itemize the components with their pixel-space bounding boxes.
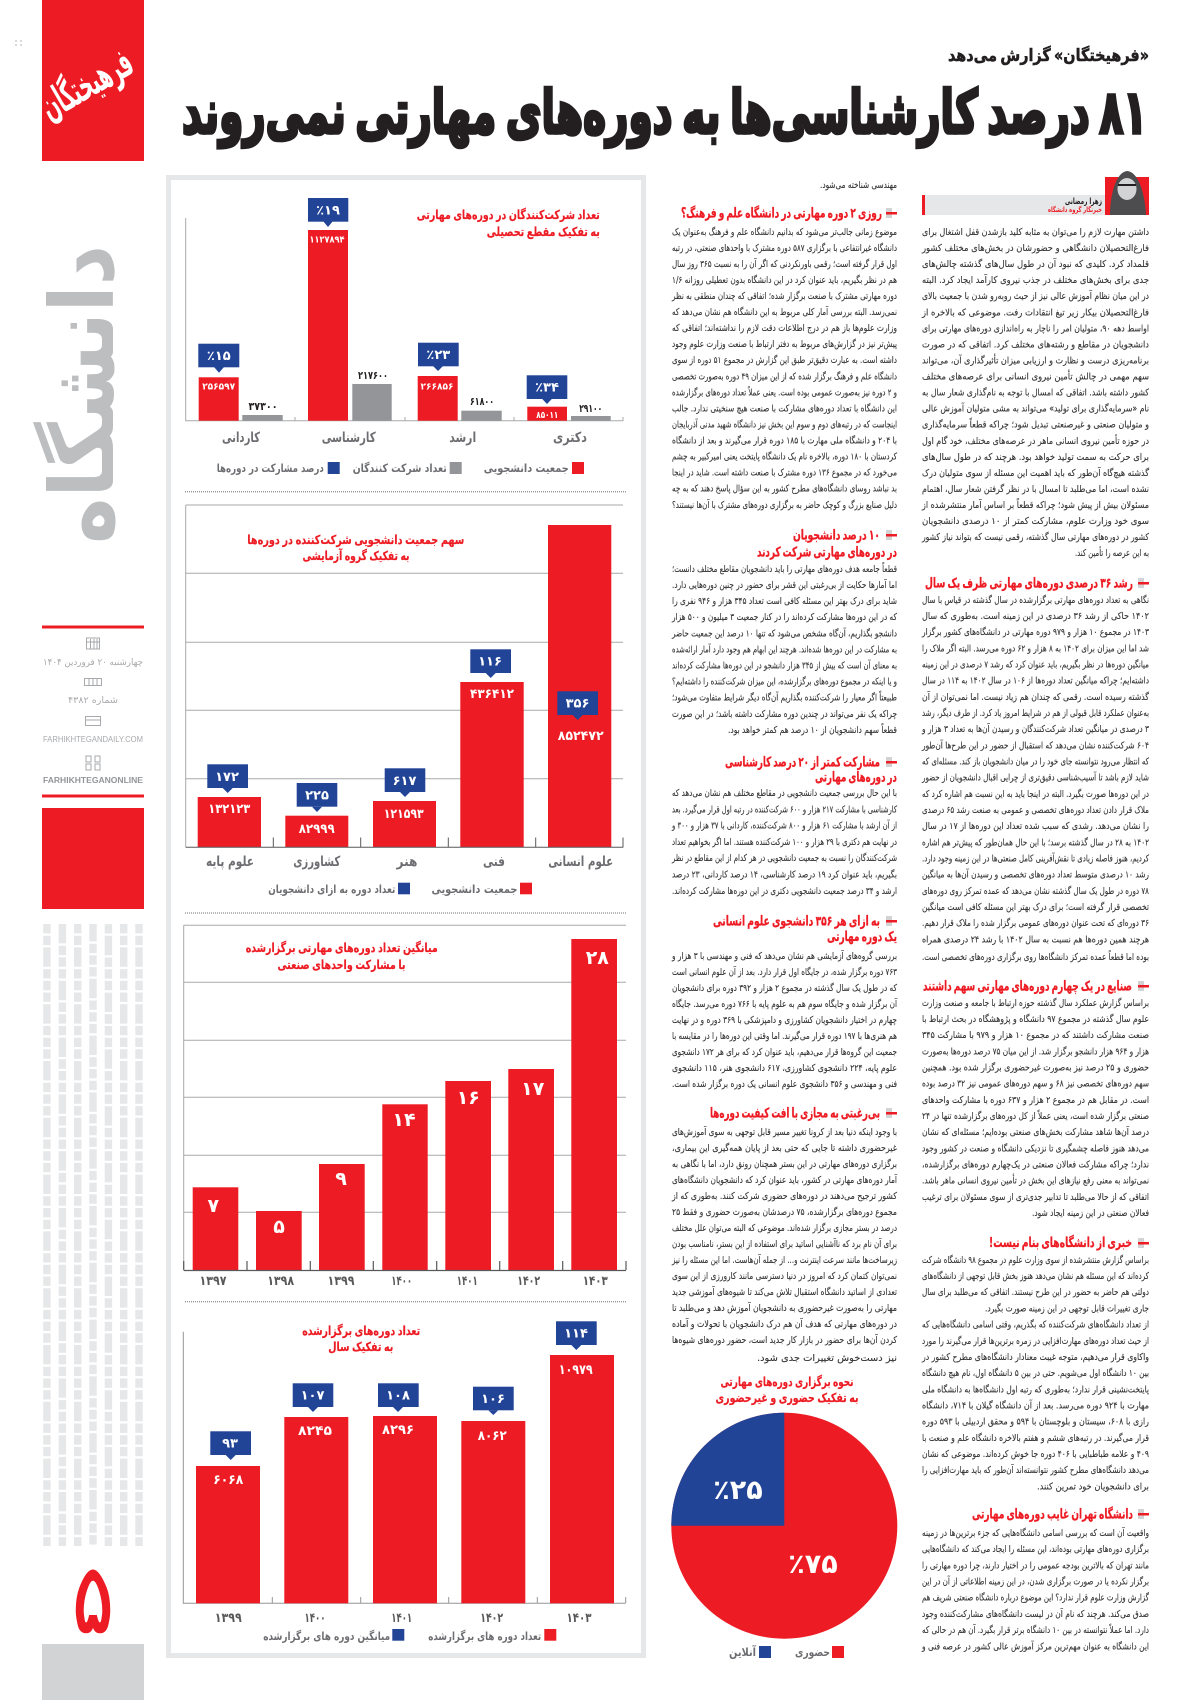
bars — [196, 1355, 614, 1603]
text block: lead: نام «سرمایه‌گذاری برای تولید» می‌تواند به مشی متولیان آموزش عالی — [922, 402, 1149, 414]
legend: تعداد دوره های برگزارشده — [428, 1629, 541, 1644]
panel: charts frame — [168, 178, 644, 1656]
text block: growth: هرچند همین دوره‌ها هم نسبت به سال ۱۴۰۲ با رشد ۲۴ درصدی همراه — [922, 934, 1149, 946]
callout: ۱۷۲: ۱۷۲ — [215, 770, 239, 785]
callout: ۱۵ — [198, 344, 239, 373]
gridlines — [186, 505, 623, 847]
year labels: ۱۳۹۸ — [267, 1274, 294, 1289]
text block: growth: ۱۴۰۳ در مجموع ۱۰ هزار و ۹۷۹ دوره مهارتی در دانشگاه‌های کشور برگزار — [921, 626, 1149, 638]
bars: دکتری — [527, 407, 611, 421]
icon: issue number — [84, 678, 102, 686]
text block: section 5: در دوره‌های مهارتی که هدف آن هم درک دانشجویان با تحولات و آماده — [672, 1317, 897, 1330]
baseline — [186, 838, 623, 848]
text block: section 4: ۷۶۳ دوره برگزار شده، در جایگاه اول قرار دارد. بعد از آن علوم انسانی است — [672, 965, 897, 978]
legend: تعداد شرکت کنندگان — [353, 461, 447, 475]
text block: tehran university: دارد. اما عملاً نتوانسته در بین ۱۰ دانشگاه برتر قرار بگیرد. آن هم در حالی که — [922, 1623, 1149, 1636]
category labels: فنی — [483, 854, 505, 870]
legend — [729, 1645, 844, 1660]
text block: section 3: در نهایت هم دکتری با ۲۹ هزار و ۱۰۰ شرکت‌کننده هستند. اما اگر بخواهیم تعداد — [672, 836, 897, 848]
year labels: ۱۴۰۰ — [304, 1611, 326, 1626]
year labels: ۱۳۹۹ — [215, 1611, 242, 1626]
bar values: ۱۰۹۷۹ — [559, 1362, 593, 1378]
text block: lead: سوی خود وزارت علوم، مشارکت کمتر از ۱۰ درصدی دانشجویان — [922, 516, 1149, 527]
bar values: ۸۲۴۵ — [298, 1423, 332, 1439]
text block: section 4: فنی و مهندسی و ۳۵۶ دانشجوی علوم انسانی یک دوره برگزار شده است. — [672, 1078, 897, 1090]
text block: lead: در حوزه تأمین نیروی انسانی ماهر در عرصه‌های مختلف، خود گام اول — [922, 434, 1149, 447]
year labels — [215, 1611, 592, 1626]
legend: میانگین دوره های برگزارشده — [263, 1629, 390, 1644]
bar values: ۸۲۹۹۹ — [299, 822, 335, 837]
text block: lead: نشده است، اما می‌طلبد تا امسال با در نظر گرفتن شعار سال، اهتمام — [922, 483, 1149, 495]
website address: FARHIKHTEGANDAILY.COM — [43, 735, 143, 744]
text block: section 1: دانشگاه علم و فرهنگ برگزار شده که از این میزان ۴۹ دوره به‌صورت تخصصی — [672, 370, 897, 382]
text block: section 5: مهارتی را به‌صورت غیرحضوری به دانشجویان آموزش دهد و می‌طلبد تا — [672, 1301, 897, 1314]
callout: ۹۳: ۹۳ — [222, 1436, 238, 1452]
bar values — [208, 687, 604, 837]
chart title: سهم جمعیت دانشجویی شرکت‌کننده در دوره‌ها — [247, 532, 464, 547]
text: continuation line: مهندسی شناخته می‌شود. — [820, 180, 897, 191]
callout: ۶۱۷: ۶۱۷ — [393, 774, 416, 789]
text block: section 5: آمار دوره‌های مهارتی در کشور، باید عنوان کرد که دانشجویان دانشگاه‌های — [672, 1173, 897, 1186]
text block: section 1: نمی‌رسد. البته بررسی آمار کلی مربوط به این دانشگاه هم نشان می‌دهد که — [672, 305, 897, 318]
category labels: علوم پایه — [206, 854, 254, 870]
text block: growth — [921, 594, 1149, 963]
text block: section 1: دانشگاه غیرانتفاعی با برگزاری ۵۸۷ دوره مشترک با واحدهای صنعتی، در رتبه — [672, 242, 897, 254]
text block: section 1: با ۲۰۴ و دانشگاه ملی مهارت با ۱۸۵ دوره قرار می‌گیرند و بعد از دانشگاه — [672, 434, 897, 446]
heading: 36 percent growth: رشد ۳۶ درصدی دوره‌های مهارتی ظرف یک سال — [925, 576, 1133, 592]
text block: section 5: مجموع دوره‌های برگزارشده، ۷۵ درصدشان به‌صورت حضوری و فقط ۲۵ — [672, 1206, 897, 1218]
text block: section 5: با وجود اینکه دنیا بعد از کرونا تغییر مسیر قابل توجهی به سوی آموزش‌های — [672, 1125, 897, 1138]
text block: top universities: ۴۰۹ و علامه طباطبایی با ۴۰۶ دوره جا خوش کرده‌اند. موضوعی که نشان — [922, 1449, 1149, 1460]
column: middle article — [671, 180, 897, 1364]
text block: section 2 — [671, 562, 897, 736]
text block: growth: داشته‌ایم؛ چراکه میانگین تعداد دوره‌ها از ۱۰۶ در سال ۱۴۰۲ به ۱۱۴ در سال — [922, 674, 1149, 686]
text block: top universities: برای دانشجویان خود تمرین کنند. — [1037, 1482, 1149, 1492]
heading: per 356 humanities students: به ازای هر ۳۵۶ دانشجوی علوم انسانی — [713, 914, 880, 930]
issue date: چهارشنبه ۲۰ فروردین ۱۴۰۴ — [43, 658, 143, 668]
text block: section 1: اول قرار گرفته است؛ رقمی باورنکردنی که اگر آن را به نسبت ۳۶۵ روز سال — [672, 257, 897, 270]
sidebar: bottom grey block — [42, 1644, 144, 1700]
icon: social networks — [86, 756, 100, 770]
callout: ۱۰۷: ۱۰۷ — [301, 1388, 324, 1404]
column: right article — [921, 171, 1149, 1652]
category labels — [206, 854, 613, 870]
text block: lead: برنامه‌ریزی درست و نظارت و ارزیابی میزان تأثیرگذاری آن، می‌تواند — [922, 354, 1149, 366]
bar values: ۳۷۳۰۰ — [248, 400, 278, 413]
text block: lead: سهم مهمی در چالش تأمین نیروی انسانی برای عرصه‌های مختلف — [922, 370, 1149, 382]
bar values: ۸۵۲۴۷۲ — [558, 729, 604, 744]
text block: section 1: این دانشگاه با تعداد دوره‌های مشارکت با صنعت هیچ سنخیتی ندارد. جالب — [672, 402, 897, 414]
text block: lead: فارغ‌التحصیلان بیکار زیر تیغ انتقادات رفت. موضوعی که بالاخره از — [921, 308, 1149, 318]
callout: ۲۲۵ — [297, 783, 337, 812]
text block: section 4: که در طول یک سال گذشته در مجموع ۲ هزار و ۳۹۲ دوره برای دانشجویان — [672, 982, 897, 994]
callout: ۶۱۷ — [385, 768, 425, 797]
text block: section 2: به معنای آن است که بیش از ۳۴۵ هزار دانشجو در این دوره‌ها مشارکت کرده‌اند — [672, 658, 897, 672]
bar values: ۱۱۲۷۸۹۴ — [310, 234, 345, 246]
text block: section 5: درصد در بستر مجازی برگزار شده‌اند. موضوعی که البته می‌توان علل مختلف — [672, 1222, 897, 1234]
callout: ۱۰۷ — [293, 1383, 333, 1412]
pie slices — [671, 1413, 897, 1639]
callout: ۱۱۴ — [556, 1321, 597, 1350]
bars: کارشناسی — [308, 230, 392, 421]
bar values: ۸۰۶۲ — [478, 1428, 507, 1444]
bar values: ۱۲۱۵۹۳ — [384, 807, 424, 822]
sidebar: issue information — [42, 626, 144, 798]
year labels: ۱۴۰۲ — [517, 1274, 540, 1289]
author box — [922, 171, 1149, 215]
text block: section 1: بد نباشد روسای دانشگاه‌های مطرح کشور به این سؤال پاسخ دهند که به چه — [672, 482, 897, 494]
callout: ۳۴: ٪۳۴ — [535, 380, 559, 396]
heading: per 356 humanities students: یک دوره مهارتی — [827, 929, 897, 945]
category labels: کارشناسی — [322, 430, 376, 446]
text block: industries — [922, 997, 1149, 1219]
callout: ۱۰۸ — [378, 1383, 419, 1412]
callout: ۱۷۲ — [207, 764, 248, 793]
text block: section 5: نیز دست‌خوش تغییرات جدی شود. — [757, 1353, 897, 1364]
text block: section 4: هم هنری‌ها با ۱۹۷ دوره قرار می‌گیرند. اما وقتی این دوره‌ها را در مقایسه با — [672, 1030, 897, 1042]
year labels: ۱۴۰۳ — [566, 1611, 592, 1626]
text block: industries: علوم سال گذشته در مجموع ۹۷ دانشگاه و پژوهشگاه در بحث ارتباط با — [922, 1013, 1149, 1025]
text block: section 2: که در این دوره‌ها مشارکت کرده‌اند را در کنار جمعیت ۳ میلیون و ۵۰۰ هزار — [671, 612, 897, 623]
text block: section 1: دلیل صنایع بزرگ و کوچک حاضر به برگزاری دوره‌های مشترک با آن‌ها نیستند؟ — [672, 498, 897, 511]
text block: lead: گذشته هیچ‌گاه آن‌طور که باید اهمیت این مسئله از سوی متولیان درک — [922, 466, 1149, 479]
text block: top universities: بین ۱۰ دانشگاه اول می‌شویم. حتی در بین ۵ دانشگاه اول، نام هیچ دانشگاه — [922, 1367, 1149, 1379]
callout: ۱۹: ٪۱۹ — [316, 204, 340, 218]
year labels — [200, 1274, 608, 1289]
text block: top universities — [921, 1254, 1149, 1492]
sidebar: barcode pattern — [47, 924, 139, 1546]
text block: lead: مسئولان بیش از پیش شود؛ چراکه قطعاً بر اساس آمار منتشرشده از — [921, 498, 1149, 511]
text block: industries: فعالان صنعتی در این زمینه ایجاد شود. — [1032, 1208, 1149, 1219]
legend: جمعیت دانشجویی — [484, 461, 569, 476]
legend: آنلاین — [729, 1645, 757, 1659]
text block: section 1: کردستان با ۱۸۰ دوره، بالاخره نام یک دانشگاه پایتخت یعنی امیرکبیر به چشم — [672, 450, 897, 462]
chart title: به تفکیک سال — [328, 1339, 393, 1354]
text block: growth: شد اما این میزان برای ۱۴۰۲ به ۸ هزار و ۶۲ دوره می‌رسد. البته اگر ملاک را — [922, 642, 1149, 654]
legend: درصد مشارکت در دوره‌ها — [217, 461, 324, 476]
text block: growth: رشد ۱۰ درصدی متوسط تعداد دوره‌های تخصصی و رسیدن آن‌ها به میانگین — [922, 868, 1149, 880]
bar values: ۴۳۶۴۱۲ — [470, 687, 514, 702]
legend — [263, 1629, 556, 1644]
chart title — [302, 1323, 420, 1354]
callout: ۱۹ — [308, 198, 348, 227]
text block: industries: صنعت مشارکت داشتند که در مجموع ۱۰ هزار و ۹۷۹ با مشارکت ۳۴۵ — [922, 1030, 1149, 1041]
text block: lead: به این عرصه را تأمین کند. — [1075, 546, 1149, 559]
bar values: ۲۹۱۰۰ — [579, 402, 602, 415]
text block: section 4 — [671, 949, 897, 1090]
bar values: ۱۷ — [521, 1078, 545, 1100]
text block: growth: ۱۴۰۲ به ۲۸ در سال گذشته برسد؛ با این حال همان‌طور که پیش‌تر هم اشاره — [922, 836, 1149, 848]
text block: section 5: برگزاری دوره‌های مهارتی در این بستر همچنان رونق دارد، اما با نگاهی به — [672, 1158, 897, 1170]
text block: section 1: هم در نظر بگیریم، باید عنوان کرد در این دانشگاه بدون تعطیلی روزانه ۱/۶ — [672, 274, 897, 286]
text block: growth: ۱۴۰۲ حاکی از رشد ۳۶ درصدی در این زمینه است. به‌طوری که سال — [922, 611, 1149, 622]
bars — [193, 939, 617, 1270]
year labels: ۱۴۰۰ — [391, 1274, 412, 1289]
text block: lead: دانشجویان در مقاطع و رشته‌های مختلف کرد. اتفاقی که در صورت — [922, 340, 1149, 350]
text block: section 2: قطعاً سهم دانشجویان از ۱۰ درصد هم کمتر خواهد بود. — [728, 723, 897, 736]
slice label: online: ٪۲۵ — [713, 1475, 763, 1506]
chart title: با مشارکت واحدهای صنعتی — [278, 957, 406, 972]
callout: ۱۰۶ — [473, 1387, 514, 1415]
bar values: ۶۰۶۸ — [213, 1472, 244, 1488]
text block: section 2: طبیعتاً اگر معیار را شرکت‌کننده بگذاریم آن‌گاه دیگر شرایط متفاوت می‌شود؛ — [672, 690, 897, 704]
chart title: به تفکیک حضوری و غیرحضوری — [716, 1390, 858, 1405]
text block: section 1: می‌خورد که در مجموع ۱۳۶ دوره مشترک با صنعت داشته است. شاید در اینجا — [672, 468, 897, 478]
text block: section 1: و ۲ دوره نیز به‌صورت عمومی بوده است. یعنی عملاً تعداد دوره‌های برگزارشده — [672, 386, 897, 398]
chart: average courses with industry — [184, 925, 626, 1289]
text block: section 1: اینجاست که در رتبه‌های دوم و سوم این بخش نیز دانشگاه شهید مدنی آذربایجان — [672, 418, 897, 430]
chart: student share by study group — [186, 505, 623, 897]
text block: section 2: شاید برای درک بهتر این مسئله کافی است تعداد ۳۴۵ هزار و ۹۴۶ نفری را — [672, 596, 897, 607]
text block: top universities: جاری تغییرات قابل توجهی در این زمینه صورت بگیرد. — [985, 1302, 1149, 1314]
callout: ۱۵: ٪۱۵ — [207, 349, 231, 364]
category labels: علوم انسانی — [548, 854, 613, 870]
legend: جمعیت دانشجویی — [432, 882, 518, 897]
text block: lead: داشتن مهارت لازم را می‌توان به مثابه کلید بازشدن قفل اشتغال برای — [922, 227, 1149, 238]
bar values: ۸۵۰۱۱ — [536, 410, 558, 421]
year labels: ۱۳۹۹ — [328, 1274, 355, 1289]
category labels: ارشد — [449, 430, 476, 446]
bar values — [213, 1362, 593, 1488]
callout: ۱۰۸: ۱۰۸ — [386, 1388, 410, 1404]
bar values: ۷ — [207, 1195, 219, 1217]
text block: section 2: قطعاً جامعه هدف دوره‌های مهارتی را باید دانشجویان مقاطع مختلف دانست؛ — [672, 562, 897, 575]
chart title — [417, 207, 600, 239]
callout: ۱۱۶ — [470, 649, 511, 678]
text block: section 1: دوره مهارتی مشترک با صنعت برگزار شده؛ اتفاقی که چندان منطقی به نظر — [671, 290, 897, 302]
chart title: تعداد شرکت‌کنندگان در دوره‌های مهارتی — [417, 207, 600, 222]
text block: section 5: زیرساخت‌ها مانند سرعت اینترنت و... از جمله آن‌هاست. اما این مسئله را نیز — [671, 1253, 897, 1266]
text block: section 1: پیش‌تر نیز در گزارش‌های مربوط به دفتر ارتباط با صنعت وزارت علوم وجود — [672, 338, 897, 350]
text block: section 3: بگیریم، باید عنوان کرد ۱۹ درصد کارشناسی، ۱۴ درصد کاردانی، ۲۳ درصد — [672, 868, 897, 880]
text block: industries: حضوری و ۲۵ درصد نیز به‌صورت غیرحضوری برگزار شده بود. همچنین — [922, 1062, 1149, 1074]
axes — [186, 218, 623, 421]
bars — [198, 525, 611, 847]
text block: section 3: با این حال بررسی جمعیت دانشجویی در مقاطع مختلف هم نشان می‌دهد که — [672, 788, 897, 799]
text block: section 4: علوم پایه، ۲۲۴ دانشجوی کشاورزی، ۶۱۷ دانشجوی هنر، ۱۱۵ دانشجوی — [672, 1063, 897, 1074]
category labels: دکتری — [553, 430, 587, 446]
text block: section 2: به مشارکت در این دوره‌ها شده‌اند. هرچند این ابهام هم وجود دارد آمار ارائه‌شده — [672, 642, 897, 656]
newspaper logo — [31, 0, 144, 161]
text block: section 2: چراکه یک نفر می‌تواند در چندین دوره مشارکت داشته باشد؛ در این صورت — [672, 709, 897, 720]
year labels: ۱۳۹۷ — [200, 1274, 227, 1289]
text block: section 5: برای آن نام برد که ناآشنایی اساتید برای استفاده از این بستر، نامناسب بودن — [672, 1237, 897, 1250]
bar values: ۱۶ — [457, 1087, 480, 1109]
axes — [183, 1332, 626, 1603]
category labels: کشاورزی — [293, 854, 341, 870]
author portrait — [1105, 171, 1149, 215]
heading: ten percent of students — [757, 528, 897, 560]
bar values: ۲۱۷۶۰۰ — [358, 369, 388, 382]
bar values — [202, 234, 602, 421]
heading: less than twenty percent: در دوره‌های مهارتی — [815, 770, 897, 786]
bar values: ۶۱۸۰۰ — [470, 395, 494, 408]
text block: lead: جدی برای بخش‌های مختلف در جذب نیروی کارآمد ایجاد کرد. البته — [922, 273, 1149, 286]
text block: lead — [921, 227, 1149, 559]
legend — [217, 461, 584, 476]
year labels: ۱۴۰۱ — [391, 1611, 412, 1626]
text block: tehran university — [921, 1526, 1149, 1652]
text block: section 4: بررسی گروه‌های آزمایشی هم نشان می‌دهد که فنی و مهندسی با ۳ هزار و — [671, 949, 897, 962]
text block: growth: را نشان می‌دهد. رشدی که سبب شده تعداد این دوره‌ها از ۱۷ در سال — [922, 821, 1149, 832]
subtitle kicker: «فرهیختگان» گزارش می‌دهد — [948, 45, 1149, 66]
text block: section 3: ارشد و ۳۴ درصد جمعیت دانشجویی دکتری در این دوره‌ها مشارکت کرده‌اند. — [672, 886, 897, 897]
text block: section 5: کشور ترجیح می‌دهند در دوره‌های حضوری شرکت کنند. به‌طوری که از — [671, 1191, 897, 1202]
chart: courses held by year — [183, 1321, 626, 1644]
category labels: هنر — [396, 854, 418, 870]
chart title — [247, 532, 464, 563]
gridlines — [184, 925, 626, 1270]
text block: lead: فارغ‌التحصیلان دانشگاهی و حضورشان در بخش‌های مختلف کشور — [921, 242, 1149, 254]
bar values: ۸۲۹۶ — [382, 1422, 414, 1438]
icon: website — [86, 716, 100, 726]
callout: ۳۵۶: ۳۵۶ — [566, 696, 589, 712]
text block: section 2: و یا اینکه در مجموع دوره‌های برگزارشده، این میزان شرکت‌کننده را داشته‌ایم؟ — [672, 676, 897, 688]
heading: science and culture university: روزی ۲ دوره مهارتی در دانشگاه علم و فرهنگ؟ — [681, 204, 882, 222]
chart title: میانگین تعداد دوره‌های مهارتی برگزارشده — [246, 940, 438, 955]
heading: less than twenty percent — [725, 754, 897, 786]
callout: ۲۲۵: ۲۲۵ — [305, 788, 329, 804]
bar values: ۱۴ — [392, 1109, 416, 1131]
text block: section 3: از آن ارشد با مشارکت ۶۱ هزار و ۸۰۰ شرکت‌کننده، کاردانی با ۳۷ هزار و ۳۰۰ و — [671, 818, 897, 832]
chart title — [716, 1374, 858, 1405]
text block: section 3: شرکت‌کنندگان را نسبت به جمعیت دانشجویی در هر کدام از این مقاطع در نظر — [671, 852, 897, 864]
bar values: ۲۵۶۵۹۷ — [202, 382, 235, 392]
legend: تعداد دوره به ازای دانشجویان — [268, 882, 395, 897]
text block: section 1: موضوع زمانی جالب‌تر می‌شود که بدانیم دانشگاه علم و فرهنگ به‌عنوان یک — [672, 226, 897, 238]
slice label: in person: ٪۷۵ — [788, 1549, 838, 1580]
chart: participants by degree — [186, 198, 623, 476]
text block: section 3 — [671, 788, 897, 897]
legend: حضوری — [795, 1645, 830, 1660]
heading: less than twenty percent: مشارکت کمتر از ۲۰ درصد کارشناسی — [725, 754, 880, 770]
bar values: ۱۳۲۱۲۳ — [208, 802, 250, 817]
text block: lead: و متولیان صنعتی و غیرصنعتی تبدیل شود؛ چراکه قطعاً سرمایه‌گذاری — [922, 417, 1149, 430]
page number: ۵ — [72, 1543, 114, 1655]
heading: ten percent of students: در دوره‌های مهارتی شرکت کردند — [757, 544, 897, 560]
author role: خبرنگار گروه دانشگاه — [1048, 205, 1102, 214]
text block: lead: اواسط دهه ۹۰، متولیان امر را ناچار به راه‌اندازی دوره‌های مهارتی برای — [922, 324, 1149, 334]
text block: section 4: جمعیت این گروه‌ها قرار می‌دهیم، باید عنوان کرد که برای هر ۱۷۲ دانشجوی — [672, 1046, 897, 1058]
text block: section 4: آن برگزار شده و جایگاه سوم هم به علوم پایه با ۷۶۶ دوره می‌رسد. جایگاه — [672, 997, 897, 1010]
text block: section 2: دانشجو بگذاریم، آن‌گاه مشخص می‌شود که تنها ۱۰ درصد این جمعیت حاضر — [671, 626, 897, 640]
icon: calendar — [86, 638, 100, 649]
year labels: ۱۴۰۱ — [457, 1274, 478, 1289]
author name: زهرا رمضانی — [1065, 197, 1102, 207]
text block: lead: کشور داشته باشد. اتفاقی که امسال با توجه به نام‌گذاری شعار سال به — [922, 386, 1149, 398]
chart title — [246, 940, 438, 972]
callout: ۳۵۶ — [557, 691, 598, 720]
social handle: FARHIKHTEGANONLINE — [43, 776, 144, 785]
text block: industries: سهم دوره‌های تخصصی نیز ۶۸ و سهم دوره‌های عمومی نیز ۳۲ درصد بوده — [922, 1078, 1149, 1090]
bar values: ۲۸ — [586, 947, 609, 969]
bar values: ۹ — [335, 1168, 347, 1190]
bars: کاردانی — [199, 377, 283, 421]
bars: ارشد — [418, 376, 502, 421]
text block: section 5: نمی‌توان کتمان کرد که امروز در دنیا دسترسی مانند کارورزی از این سوی — [672, 1271, 897, 1282]
sidebar: section name rotated: دانشگاه — [31, 245, 134, 544]
text block: section 4: چهارم در اختیار دانشجویان کشاورزی و دامپزشکی با ۳۶۹ دوره و در نهایت — [672, 1015, 897, 1026]
text block: section 5: کردن آن‌ها برای حضور در بازار کار جدید است، حضور دوره‌های شیوه‌ها — [672, 1333, 897, 1346]
text block: top universities: رازی با ۶۰۸، سیستان و بلوچستان با ۵۹۴ و محقق اردبیلی با ۵۹۳ دوره — [922, 1416, 1149, 1428]
text block: section 5: غیرحضوری داشته تا جایی که حتی بعد از پایان همه‌گیری این بیماری، — [672, 1142, 897, 1154]
bar values — [207, 947, 609, 1238]
text block: section 5 — [671, 1125, 897, 1364]
bar values: ۲۶۶۸۵۶ — [420, 382, 454, 392]
chart title: به تفکیک گروه آزمایشی — [302, 548, 410, 563]
year labels: ۱۴۰۲ — [480, 1611, 503, 1626]
bar values: ۵ — [273, 1216, 285, 1238]
callout: ۱۰۶: ۱۰۶ — [481, 1392, 505, 1407]
text block: section 3: کارشناسی با مشارکت ۲۱۷ هزار و ۶۰۰ شرکت‌کننده در رتبه اول قرار می‌گیرد. بعد — [672, 804, 897, 816]
category labels: کاردانی — [222, 430, 261, 446]
issue number: شماره ۴۳۸۲ — [68, 696, 118, 706]
callout: ۱۱۴: ۱۱۴ — [564, 1326, 588, 1342]
heading: ten percent of students: ۱۰ درصد دانشجویان — [793, 528, 880, 544]
text block: section 1: وزارت علوم‌ها باز هم در درج اطلاعات دقت لازم را نداشته‌اند؛ اتفاقی که — [672, 323, 897, 334]
chart: pie attendance mode — [671, 1374, 897, 1660]
chart title: نحوه برگزاری دوره‌های مهارتی — [720, 1374, 854, 1389]
text block: section 5: تعدادی از اساتید دانشگاه استقبال تلاش می‌کند تا شیوه‌های آموزشی جدید — [672, 1285, 897, 1298]
text block: industries: است. در مقابل هم در مجموع ۲ هزار و ۶۳۷ دوره با مشارکت واحدهای — [922, 1095, 1149, 1106]
callout: ۲۳: ٪۲۳ — [426, 348, 450, 363]
chart title: به تفکیک مقطع تحصیلی — [487, 224, 600, 239]
heading: lack of interest in online: بی‌رغبتی به مجازی با افت کیفیت دوره‌ها — [710, 1106, 880, 1122]
text block: industries: هزار و ۹۶۴ هزار دانشجو برگزار شد. از این میان ۷۵ درصد دوره‌ها به‌صورت — [922, 1046, 1149, 1058]
text block: growth: ۶۰۴ شرکت‌کننده نشان می‌دهد که استقبال از حضور در این طرح‌ها آن‌طور — [921, 738, 1149, 752]
legend — [268, 882, 532, 897]
chart title: تعداد دوره‌های برگزارشده — [302, 1323, 420, 1338]
text block: top universities: مهارت با ۹۲۴ دوره می‌رسد. بعد از آن دانشگاه گیلان با ۷۱۴، دانشگاه — [922, 1398, 1149, 1412]
text block: lead: برای حرکت به سمت تولید خواهد بود. هرچند که در طول سال‌های — [922, 452, 1149, 463]
callout: ۲۳ — [418, 343, 459, 371]
category labels — [222, 430, 587, 446]
text block: lead: قلمداد کرد. کلیدی که نبود آن در طول سال‌های گذشته چالش‌های — [922, 257, 1149, 270]
callout: ۱۱۶: ۱۱۶ — [478, 654, 502, 670]
text block: section 1: داشته است. به عبارت دقیق‌تر طبق این گزارش در مجموع ۵۱ دوره از سوی — [672, 354, 897, 366]
baseline — [184, 1261, 626, 1270]
crop mark — [15, 40, 22, 46]
text block: section 1 — [671, 226, 897, 511]
sidebar: red block — [42, 808, 144, 909]
callout: ۹۳ — [210, 1431, 251, 1460]
heading: per 356 humanities students — [713, 914, 897, 945]
callout: ۳۴ — [527, 375, 567, 404]
year labels: ۱۴۰۳ — [583, 1274, 608, 1289]
text block: section 2: اما آمارها حکایت از بی‌رغبتی این قشر برای حضور در چنین دوره‌هایی دارد. — [672, 578, 897, 591]
